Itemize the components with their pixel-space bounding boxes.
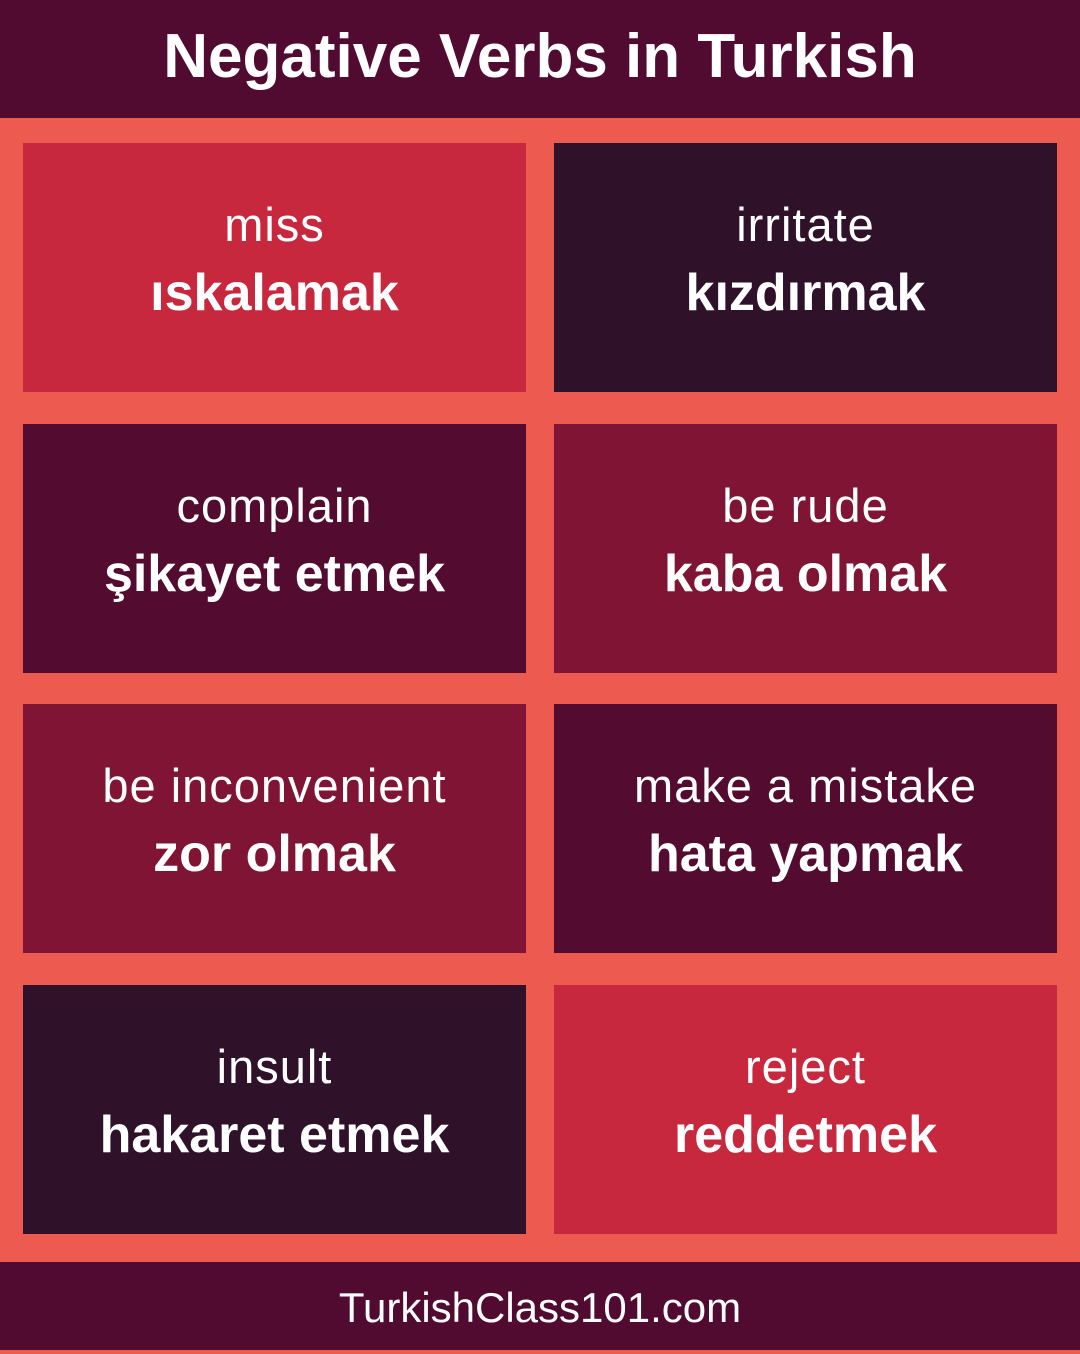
card: complain: şikayet etmek [104,545,445,603]
card: be rude: kaba olmak [664,545,947,603]
card: reject: reddetmek [674,1106,937,1164]
card: reject: reject [745,1040,866,1093]
footer: TurkishClass101.com [339,1284,741,1331]
card: make a mistake [554,704,1057,953]
card: miss: miss [224,198,325,251]
card: insult: hakaret etmek [100,1106,449,1164]
card: reject [554,985,1057,1234]
card: insult [23,985,526,1234]
card: be rude: be rude [722,479,889,532]
card: irritate: irritate [736,198,875,251]
card: be inconvenient: be inconvenient [102,759,447,812]
card: complain [23,424,526,673]
card: be rude [554,424,1057,673]
card: irritate: kızdırmak [686,264,925,322]
card: miss: ıskalamak [150,264,399,322]
title [0,0,1080,118]
card: be inconvenient: zor olmak [153,825,396,883]
card: irritate [554,143,1057,392]
card: miss [23,143,526,392]
card: insult: insult [217,1040,332,1093]
card: complain: complain [176,479,373,532]
card: make a mistake: make a mistake [634,759,977,812]
card: be inconvenient [23,704,526,953]
title: Negative Verbs in Turkish [163,22,917,91]
card: make a mistake: hata yapmak [648,825,963,883]
footer [0,1262,1080,1350]
